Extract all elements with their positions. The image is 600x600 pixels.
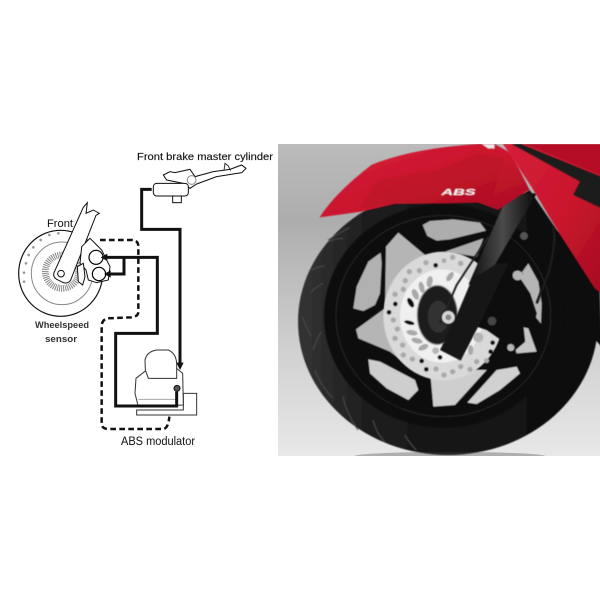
label: ABS modulator: ABS modulator [121,436,195,448]
line: modulator to caliper [101,254,177,406]
label: Front brake master cylinder: Front brake master cylinder [137,151,274,163]
label: Wheelspeed: Wheelspeed [35,320,89,331]
red front fender [320,144,530,217]
hub and ABS sensor ring [417,286,457,344]
brake disc [383,252,503,380]
photo background [278,144,600,456]
front fork and brake caliper [432,193,554,361]
wheel spoke windows [353,219,542,407]
icon: ABS modulator unit [135,350,197,415]
tyre and tread [298,188,600,455]
panel: ABS brake system diagram [19,151,274,448]
label: Front: Front [47,218,73,230]
dashed line: wheel speed sensor wiring [100,240,169,429]
icon: brake master cylinder and lever [153,163,246,203]
ABS badge: ABS [439,188,477,197]
line: master cylinder to modulator [142,189,184,370]
shadow under tyre [355,452,545,456]
label: sensor: sensor [45,334,77,345]
wheel rim [324,204,563,428]
icon: front brake disc and caliper [19,203,110,316]
panel: photo of scooter front wheel [278,144,600,460]
red scooter body panels [481,144,600,293]
